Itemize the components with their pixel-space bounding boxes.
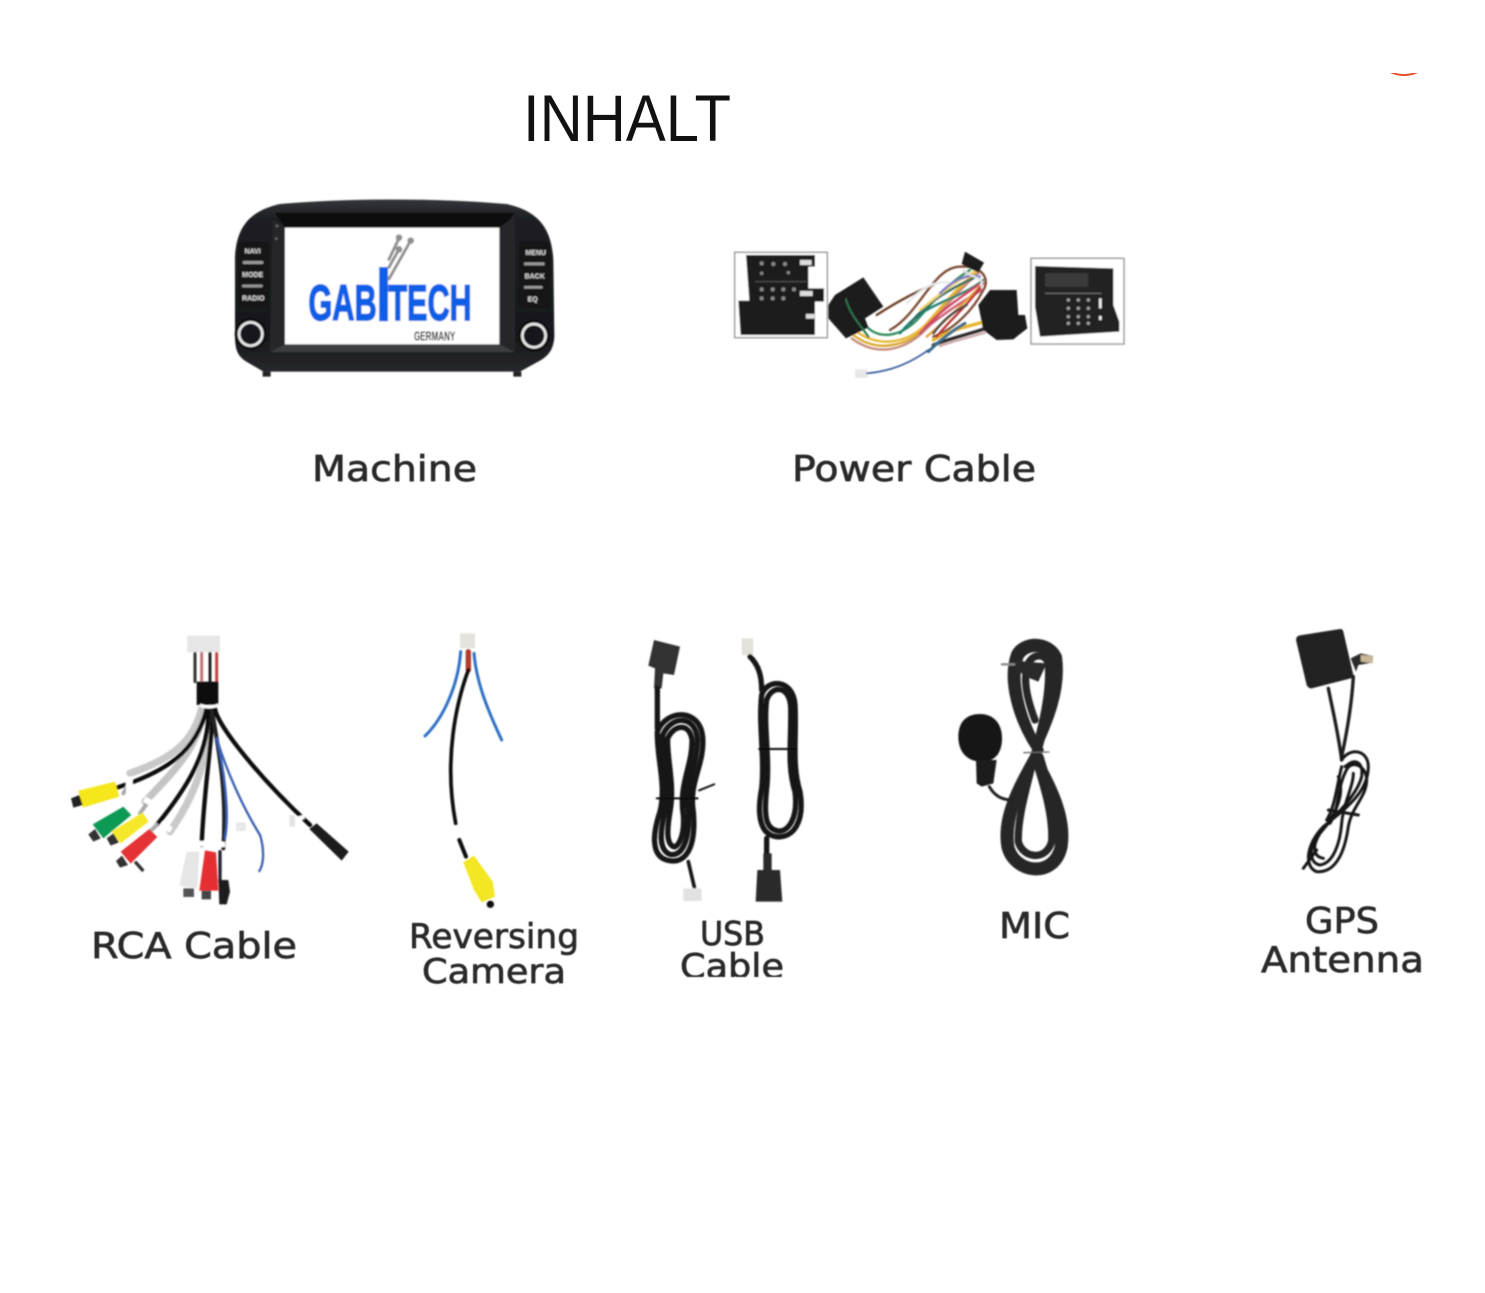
yellow plug 2 xyxy=(107,812,149,846)
white connector xyxy=(460,633,475,648)
left button panel: NAVI xyxy=(245,248,261,255)
USB plug one xyxy=(648,640,680,688)
head unit body xyxy=(235,199,554,372)
logo: I xyxy=(377,252,391,336)
red plug 2 xyxy=(199,850,218,899)
harness wires xyxy=(847,267,986,352)
label: Reversing Camera: Reversing xyxy=(409,917,579,957)
mic neck and lead xyxy=(976,760,1012,800)
label: MIC: MIC xyxy=(999,906,1070,947)
left button panel xyxy=(238,242,269,307)
small white connector xyxy=(855,350,928,378)
cable fan xyxy=(115,708,310,882)
audio jack xyxy=(1001,661,1047,682)
logo xyxy=(308,234,472,344)
white multi-pin connector xyxy=(187,636,220,705)
logo: TECH xyxy=(388,275,472,331)
coil one xyxy=(655,688,703,890)
foam head xyxy=(958,714,1002,762)
yellow plug xyxy=(71,782,119,808)
red plug xyxy=(116,829,157,871)
antenna box xyxy=(1296,629,1353,688)
white tie xyxy=(200,705,218,707)
antenna coil xyxy=(1303,752,1368,872)
label: Reversing Camera: Camera xyxy=(422,952,566,992)
logo: GERMANY xyxy=(414,329,455,344)
top plug xyxy=(962,252,984,273)
right plug xyxy=(978,290,1027,340)
knobs xyxy=(235,318,550,352)
label: GPS Antenna xyxy=(1261,901,1424,981)
label: RCA Cable: RCA Cable xyxy=(91,926,297,967)
coil two xyxy=(750,657,801,855)
label: USB Cable: USB xyxy=(700,914,765,953)
power cable illustration xyxy=(735,252,1124,378)
side connector xyxy=(1351,653,1373,672)
label: USB Cable: Cable xyxy=(680,947,784,987)
label: GPS Antenna: GPS xyxy=(1305,901,1379,942)
label: Power Cable: Power Cable xyxy=(792,449,1036,490)
reversing camera cable illustration xyxy=(425,633,502,908)
RCA cable illustration xyxy=(71,636,349,904)
wires xyxy=(425,652,502,857)
screen xyxy=(285,228,499,344)
logo: GAB xyxy=(308,275,377,331)
yellow plug xyxy=(463,856,495,902)
headphone jack xyxy=(289,815,349,861)
microphone illustration xyxy=(958,642,1065,872)
cable tie xyxy=(1023,750,1049,755)
small white connector one xyxy=(683,888,702,901)
label: GPS Antenna: Antenna xyxy=(1261,940,1424,981)
green plug xyxy=(88,807,131,842)
label: Reversing Camera xyxy=(411,920,578,985)
USB plug two xyxy=(756,853,782,902)
right button panel: EQ xyxy=(528,296,538,303)
antenna leads xyxy=(1328,677,1353,760)
plug tip xyxy=(487,901,494,908)
right button panel: BACK xyxy=(525,273,545,280)
small black connector xyxy=(218,880,230,904)
coiled cable xyxy=(1004,642,1065,872)
machine: head unit illustration xyxy=(235,199,554,377)
title: INHALT xyxy=(523,81,731,155)
label: Machine: Machine xyxy=(312,449,477,490)
left button panel: RADIO xyxy=(242,296,265,303)
feet xyxy=(263,372,521,377)
small white connector two xyxy=(742,638,753,655)
left connector inset xyxy=(735,252,827,338)
label: USB Cable xyxy=(680,919,784,978)
right button panel xyxy=(519,242,550,308)
white plug xyxy=(179,852,199,897)
right connector inset xyxy=(1031,258,1124,344)
USB cable illustration xyxy=(648,638,801,902)
right button panel: MENU xyxy=(525,250,546,257)
bezel xyxy=(275,213,515,227)
left button panel: MODE xyxy=(242,272,263,279)
decorative red mark xyxy=(1390,73,1418,76)
left plug xyxy=(828,277,883,338)
white cable tags xyxy=(126,777,259,847)
GPS antenna illustration xyxy=(1296,629,1373,872)
